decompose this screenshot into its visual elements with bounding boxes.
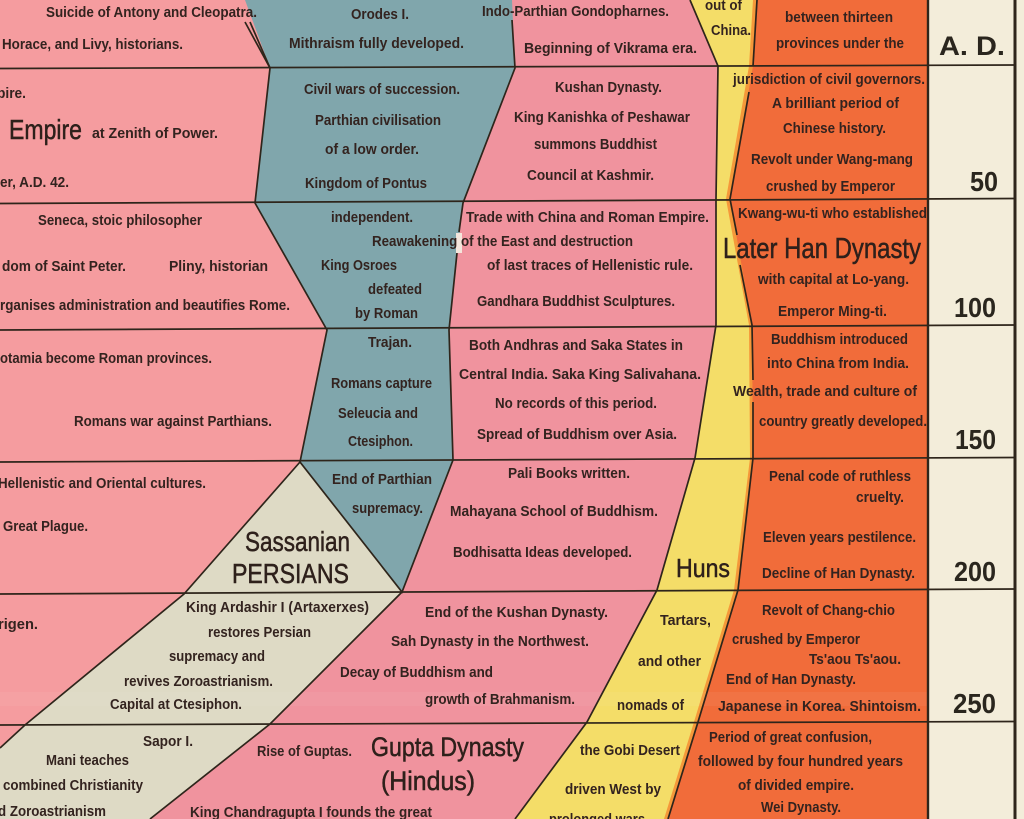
event: Gandhara: Gandhara Buddhist Sculptures.: [477, 294, 675, 310]
event: King Osroes: King Osroes: [321, 258, 397, 274]
event: Kushan Dynasty: Kushan Dynasty.: [555, 80, 662, 96]
year 200: 200: [954, 556, 996, 587]
event: Ming-ti: Emperor Ming-ti.: [778, 304, 887, 320]
year 150: 150: [955, 424, 996, 455]
event: country developed: country greatly developed.: [759, 414, 927, 430]
event: Sapor I: Sapor I.: [143, 734, 193, 750]
event: defeated: defeated: [368, 282, 422, 298]
event: supremacy and: supremacy and: [169, 649, 265, 665]
event: at Zenith of Power: at Zenith of Power.: [92, 126, 218, 142]
event: Romans capture: Romans capture: [331, 376, 432, 392]
event: by Roman: by Roman: [355, 306, 418, 322]
event: Zoroastrianism revival: revives Zoroastrianism.: [124, 674, 273, 690]
event: summons Buddhist: summons Buddhist: [534, 137, 657, 153]
gap in border at Reawakening: [456, 233, 462, 253]
event: Lo-yang: with capital at Lo-yang.: [757, 272, 909, 288]
event: Seleucia: Seleucia and: [338, 406, 418, 422]
panel: Chinese dynasties orange band: [668, 0, 928, 819]
event: Pontus: Kingdom of Pontus: [305, 176, 427, 192]
timeline labels: [939, 31, 1005, 719]
event: into China: into China from India.: [767, 356, 909, 372]
event: provinces: provinces under the: [776, 36, 904, 52]
event: no records: No records of this period.: [495, 396, 657, 412]
event: Mithraism: Mithraism fully developed.: [289, 36, 464, 52]
event: civil wars: Civil wars of succession.: [304, 82, 460, 98]
panel: Indian dynasties pink band: [150, 0, 718, 819]
event: Wang-mang: Revolt under Wang-mang: [751, 152, 913, 168]
event: war against Parthians: Romans war against Parthians.: [74, 414, 272, 430]
event: and other: and other: [638, 654, 701, 670]
event: great confusion: Period of great confusion,: [709, 730, 872, 746]
event: Salivahana: Central India. Saka King Salivahana.: [459, 367, 701, 383]
event: decay of Buddhism: Decay of Buddhism and: [340, 665, 493, 681]
event: administration of Rome: rganises administration and beautifies Rome.: [0, 298, 290, 314]
event: Andhras and Saka: Both Andhras and Saka States in: [469, 338, 683, 354]
event: combined Christianity: combined Christianity: [3, 778, 143, 794]
fold highlight: [0, 692, 930, 706]
year 50: 50: [970, 166, 998, 197]
event: historians: Horace, and Livy, historians.: [2, 37, 183, 53]
event: supremacy: supremacy.: [352, 501, 423, 517]
heading: Sassanian: Sassanian: [245, 526, 350, 557]
event: capital: Capital at Ctesiphon.: [110, 697, 242, 713]
event: independent: independent.: [331, 210, 413, 226]
event: Ctesiphon: Ctesiphon.: [348, 434, 413, 450]
event: Great Plague: Great Plague.: [3, 519, 88, 535]
event: between thirteen: between thirteen: [785, 10, 893, 26]
event: Antony and Cleopatra: Suicide of Antony and Cleopatra.: [46, 5, 257, 21]
event: End of Parthian: End of Parthian: [332, 472, 432, 488]
event: end of Han: End of Han Dynasty.: [726, 672, 856, 688]
event: crushed by Emperor: crushed by Emperor: [766, 179, 895, 195]
event: Council at Kashmir: Council at Kashmir.: [527, 168, 654, 184]
text: Chinese dynasties band: [698, 10, 927, 816]
event: nomads of: nomads of: [617, 698, 684, 714]
event: Mahayana: Mahayana School of Buddhism.: [450, 504, 658, 520]
event: Seneca: Seneca, stoic philosopher: [38, 213, 202, 229]
event: King Kanishka: King Kanishka of Peshawar: [514, 110, 690, 126]
event: restores Persian: restores Persian: [208, 625, 311, 641]
event: Mani teaches: Mani teaches: [46, 753, 129, 769]
event: A.D. 42: er, A.D. 42.: [0, 175, 69, 191]
event: driven West: driven West by: [565, 782, 661, 798]
event: Bodhisatta: Bodhisatta Ideas developed.: [453, 545, 632, 561]
heading: Huns: Huns: [676, 553, 730, 583]
event: Roman provinces: otamia become Roman provinces.: [0, 351, 212, 367]
event: civilisation: Parthian civilisation: [315, 113, 441, 129]
text: Sassanian Persians band: [0, 526, 369, 819]
event: Japanese in Korea: Japanese in Korea. Shintoism.: [718, 699, 921, 715]
event: Hellenistic rule: of last traces of Hellenistic rule.: [487, 258, 693, 274]
text: Roman Empire band: [0, 5, 290, 633]
panel: Sassanian Persians band: [0, 462, 402, 819]
event: Saint Peter: dom of Saint Peter.: [2, 259, 126, 275]
event: brilliant period: A brilliant period of: [772, 96, 899, 112]
text: Indian dynasties band: [190, 4, 709, 819]
event: Tartars: Tartars,: [660, 613, 711, 629]
heading: Empire: Empire: [9, 114, 82, 145]
event: decline of Han: Decline of Han Dynasty.: [762, 566, 915, 582]
heading: A. D.: A. D.: [939, 31, 1005, 61]
event: Penal code: Penal code of ruthless: [769, 469, 911, 485]
event: Reawakening: Reawakening of the East and destruction: [372, 234, 633, 250]
event: pestilence: Eleven years pestilence.: [763, 530, 916, 546]
event: Buddhism introduced: Buddhism introduced: [771, 332, 908, 348]
event: Wei Dynasty: Wei Dynasty.: [761, 800, 841, 816]
year 100: 100: [954, 292, 996, 323]
event: King Ardashir: King Ardashir I (Artaxerxes): [186, 600, 369, 616]
event: Wealth: Wealth, trade and culture of: [733, 384, 917, 400]
heading: Later Han Dynasty: Later Han Dynasty: [723, 233, 921, 265]
event: Gobi Desert: the Gobi Desert: [580, 743, 680, 759]
event: spread of Buddhism: Spread of Buddhism over Asia.: [477, 427, 677, 443]
event: divided empire: of divided empire.: [738, 778, 854, 794]
event: Orodes I: Orodes I.: [351, 7, 409, 23]
panel: Roman Empire pink band: [0, 0, 560, 819]
event: Vikrama era: Beginning of Vikrama era.: [524, 41, 697, 57]
heading: Gupta Dynasty: Gupta Dynasty: [371, 732, 524, 762]
panel: orange fringe of Chinese band: [664, 0, 928, 819]
event: Brahmanism: growth of Brahmanism.: [425, 692, 575, 708]
text: Huns band: [549, 0, 751, 819]
event: Rise of Guptas: Rise of Guptas.: [257, 744, 352, 760]
event: Chinese history: Chinese history.: [783, 121, 886, 137]
event: jurisdiction: jurisdiction of civil governors.: [732, 72, 925, 88]
text: Parthian band: [289, 7, 633, 517]
panel: Huns yellow band: [515, 0, 760, 819]
event: Chang-chio: Revolt of Chang-chio: [762, 603, 895, 619]
event: low order: of a low order.: [325, 142, 419, 158]
year 250: 250: [953, 688, 996, 719]
heading: PERSIANS: PERSIANS: [232, 558, 349, 589]
event: crushed by Emperor: crushed by Emperor: [732, 632, 860, 648]
event: Pali Books: Pali Books written.: [508, 466, 630, 482]
event: cruelty: cruelty.: [856, 490, 904, 506]
event: end of Kushan: End of the Kushan Dynasty.: [425, 605, 608, 621]
event: Gondopharnes: Indo-Parthian Gondopharnes.: [482, 4, 669, 20]
panel: Parthian blue band: [245, 0, 515, 592]
event: Kwang-wu-ti: Kwang-wu-ti who established: [738, 206, 927, 222]
panel: A.D. timeline column: [928, 0, 1024, 819]
event: Ts'aou Ts'aou: Ts'aou Ts'aou.: [809, 652, 901, 668]
event: cultures: Hellenistic and Oriental cultures.: [0, 476, 206, 492]
heading: Hindus: (Hindus): [381, 766, 475, 796]
event: China: China.: [711, 23, 751, 39]
event: Sah Dynasty: Sah Dynasty in the Northwest.: [391, 634, 589, 650]
event: trade: Trade with China and Roman Empire.: [466, 210, 709, 226]
event: Pliny: Pliny, historian: [169, 259, 268, 275]
event: four hundred years: followed by four hundred years: [698, 754, 903, 770]
event: Trajan: Trajan.: [368, 335, 412, 351]
